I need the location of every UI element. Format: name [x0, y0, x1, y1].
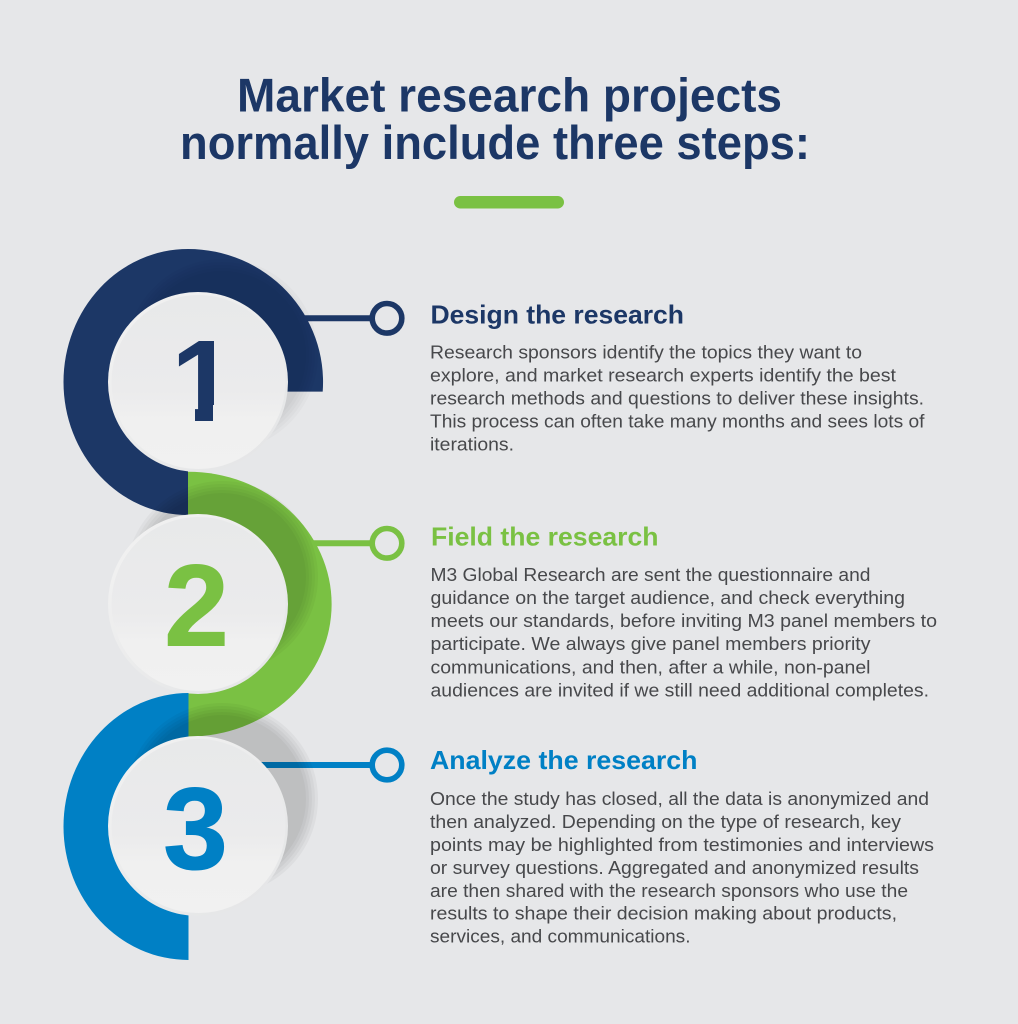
number 3: 3 — [163, 764, 228, 894]
body text: analyze the research: are then shared with the research sponsors who use the — [430, 881, 908, 901]
disc: step 1 — [108, 292, 288, 472]
body text: field the research: M3 Global Research are sent the questionnaire and — [430, 565, 870, 585]
body text: design the research: Research sponsors identify the topics they want to — [430, 342, 862, 362]
body text: field the research: guidance on the target audience, and check everything — [430, 588, 905, 608]
heading: analyze the research: Analyze the research — [430, 745, 698, 775]
body text: analyze the research — [430, 789, 934, 947]
disc: step 3 — [108, 736, 288, 916]
disc: step 2 — [108, 514, 288, 694]
arc: step 2 green ring — [188, 472, 332, 737]
heading: design the research: Design the research — [430, 299, 684, 329]
body text: field the research — [430, 565, 937, 700]
body text: analyze the research: then analyzed. Depending on the type of research, key — [430, 812, 901, 832]
body text: design the research: iterations. — [430, 435, 514, 455]
shadow: step 1 disc — [126, 259, 318, 451]
connector: step 1 line and node — [296, 304, 402, 333]
body text: analyze the research: services, and communications. — [430, 927, 690, 947]
body text: field the research: communications, and then, after a while, non-panel — [430, 657, 870, 677]
body text: analyze the research: or survey questions. Aggregated and anonymized results — [430, 858, 919, 878]
heading: field the research: Field the research — [431, 522, 658, 552]
title — [180, 69, 810, 169]
body text: field the research: participate. We always give panel members priority — [430, 634, 870, 654]
body text: field the research: audiences are invited if we still need additional completes. — [430, 680, 929, 700]
connector: step 3 line and node — [250, 750, 402, 780]
shadow: step 2 disc — [126, 481, 318, 673]
number 2: 2 — [164, 541, 229, 671]
title accent bar — [454, 196, 564, 208]
body text: analyze the research: points may be highlighted from testimonies and interviews — [430, 835, 934, 855]
step 3 graphic — [64, 693, 402, 960]
body text: design the research: explore, and market research experts identify the best — [430, 366, 896, 386]
body text: analyze the research: Once the study has closed, all the data is anonymized and — [430, 789, 929, 809]
body text: design the research: This process can often take many months and sees lots of — [430, 412, 926, 432]
body text: analyze the research: results to shape their decision making about products, — [430, 904, 897, 924]
connector: step 2 line and node — [310, 528, 402, 558]
step 1 graphic — [63, 249, 402, 515]
body text: design the research: research methods and questions to deliver these insights. — [430, 388, 924, 408]
arc: step 3 blue ring — [64, 693, 189, 960]
arc: step 1 navy ring — [63, 249, 323, 515]
step 2 graphic — [108, 472, 402, 737]
shadow: step 3 disc — [126, 703, 318, 895]
number 1: 1 — [171, 316, 236, 446]
title: Market research projects — [237, 69, 782, 122]
body text: field the research: meets our standards, before inviting M3 panel members to — [430, 611, 937, 631]
title: normally include three steps: — [180, 116, 810, 169]
body text: design the research — [430, 342, 926, 455]
